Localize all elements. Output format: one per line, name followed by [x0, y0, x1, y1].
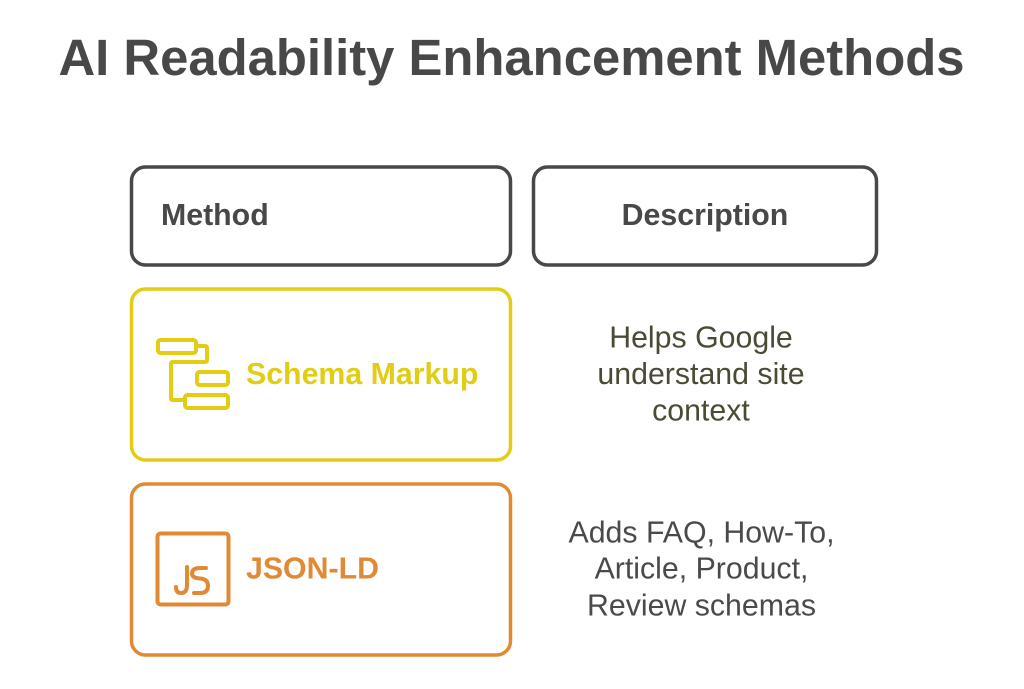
description: schema markup [597, 322, 805, 428]
panel: json-ld [132, 484, 510, 655]
header: method: Method [161, 199, 269, 232]
description: json-ld: Review schemas [587, 590, 816, 622]
panel: schema markup [132, 289, 510, 460]
description: schema markup: Helps Google [609, 322, 793, 354]
description: json-ld [568, 516, 835, 622]
header: description [534, 167, 876, 265]
icon: js square [158, 534, 228, 604]
header: method [132, 167, 510, 265]
description: schema markup: understand site [597, 358, 805, 391]
header: description: Description [622, 199, 788, 232]
description: json-ld: Article, Product, [595, 552, 808, 586]
title: AI Readability Enhancement Methods [58, 29, 965, 86]
label: json-ld: JSON-LD [246, 552, 379, 586]
label: schema markup: Schema Markup [246, 358, 478, 391]
description: json-ld: Adds FAQ, How-To, [568, 516, 835, 550]
description: schema markup: context [652, 394, 750, 428]
icon: hierarchy [158, 340, 228, 408]
